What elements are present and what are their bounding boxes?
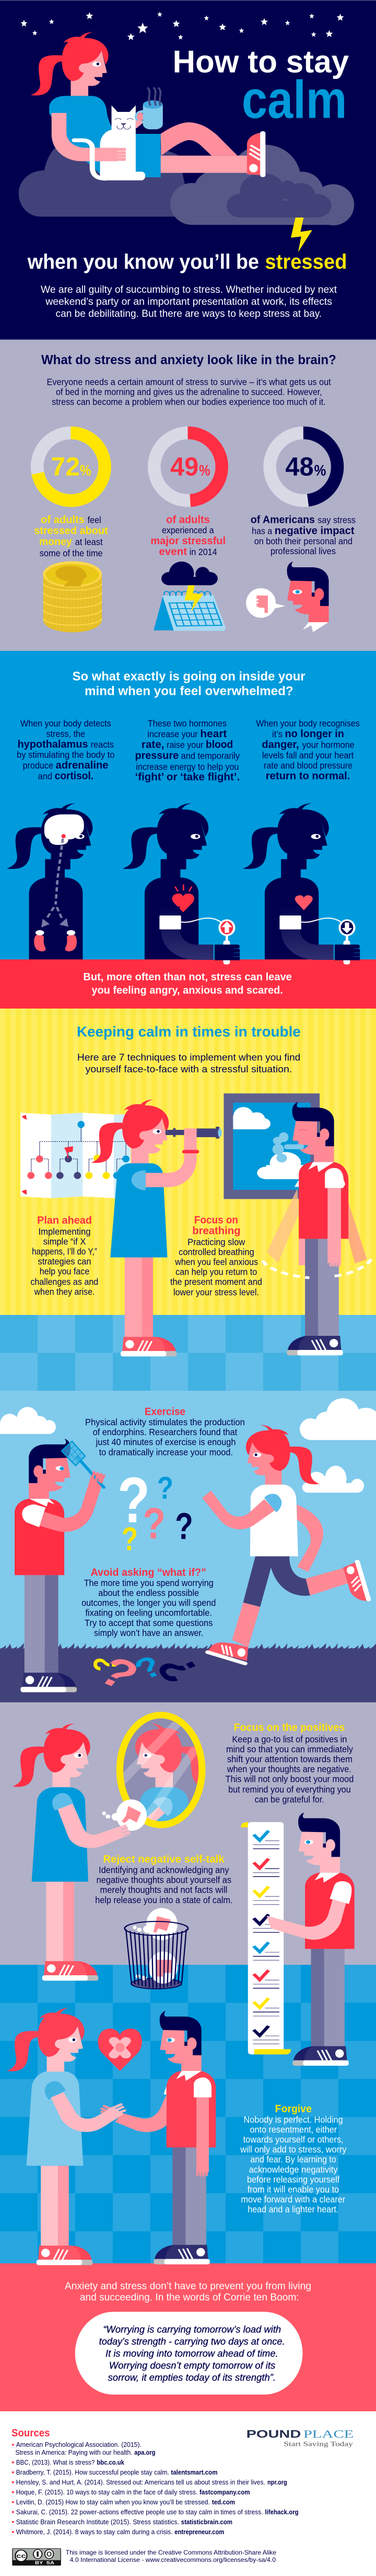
panel: what goes on inside xyxy=(7,669,360,965)
text: seven techniques: Here are 7 techniques to implement when you find xyxy=(77,1052,300,1062)
icon: bandaged heart xyxy=(98,2029,142,2071)
caption: money xyxy=(34,513,108,558)
text: plan ahead: Plan ahead xyxy=(37,1214,92,1227)
quote bubble xyxy=(75,2312,302,2395)
text: step three xyxy=(256,718,360,782)
text: what if: about the endless possible xyxy=(98,1588,199,1598)
panel: forgive xyxy=(7,2008,347,2246)
caption: money: of adults xyxy=(41,513,85,526)
caption: money: some of the time xyxy=(40,548,103,558)
text: seven techniques: yourself face-to-face with a stressful situation. xyxy=(85,1063,292,1074)
figure: return to normal xyxy=(243,803,360,965)
caption: negative impact xyxy=(251,513,356,556)
text: forgive: acknowledge negativity xyxy=(249,2165,338,2175)
caption: negative impact: professional lives xyxy=(271,546,336,556)
text: focus on breathing: can help you return to xyxy=(175,1267,257,1277)
heading: inside your mind: mind when you feel overwhelmed? xyxy=(85,684,293,698)
source list: Bradberry, T. (2015). How successful people stay calm. xyxy=(16,2469,169,2476)
heading: keeping calm: Keeping calm in times in trouble xyxy=(77,1023,301,1039)
text: forgive xyxy=(240,2103,347,2215)
text: step two: raise your xyxy=(167,740,203,750)
text: focus on breathing: Focus on xyxy=(194,1214,238,1226)
source list: fastcompany.com xyxy=(199,2489,250,2496)
chart: 49 percent ring: 49 xyxy=(170,452,198,481)
source list: Stress in America: Paying with our health. xyxy=(15,2449,132,2456)
question marks on the ground: ? xyxy=(146,1649,211,1690)
text: focus on positives xyxy=(226,1721,354,1804)
text: plan ahead: help you face xyxy=(40,1267,89,1277)
panel: exercise and what if xyxy=(0,1398,376,1702)
text: step two: heart xyxy=(200,728,227,740)
text: exercise: of endorphins. Researchers found that xyxy=(93,1427,237,1437)
panel: plan ahead and breathing xyxy=(20,1093,372,1337)
girl shaking hands xyxy=(7,2008,85,2246)
text: plan ahead: strategies can xyxy=(38,1257,91,1267)
text: what if: Avoid asking “what if?” xyxy=(91,1566,206,1578)
source list: Whitmore, J. (2014). 8 ways to stay calm during a crisis. xyxy=(16,2528,173,2536)
shoe: girl at mirror xyxy=(42,1961,98,1980)
quote bubble: today’s strength - carrying two days at once. xyxy=(99,2336,285,2347)
text: closing statement xyxy=(65,2280,311,2303)
question marks on the ground xyxy=(88,1647,211,1699)
question marks falling: ? xyxy=(157,1471,173,1506)
text: exercise: just 40 minutes of exercise is enough xyxy=(96,1437,236,1447)
intro text xyxy=(41,284,337,319)
question marks falling: ? xyxy=(175,1505,193,1547)
panel: closing quote xyxy=(37,2245,311,2395)
man shaking hands xyxy=(51,2011,216,2246)
mirror xyxy=(116,1712,213,1828)
source list: ted.com xyxy=(212,2499,235,2506)
title xyxy=(173,44,349,129)
man with fly swatter xyxy=(15,1439,105,1692)
text: what if: The more time you spend worrying xyxy=(84,1578,214,1588)
text: brain intro xyxy=(47,377,331,407)
text: exercise: Physical activity stimulates the production xyxy=(85,1417,245,1427)
text: reject negative self-talk: merely thoughts and not facts will xyxy=(100,1885,227,1895)
logo: poundplace xyxy=(246,2428,354,2448)
text: step one xyxy=(17,718,114,782)
map with decision tree xyxy=(20,1113,131,1198)
badge: creative commons xyxy=(13,2548,61,2566)
badge: creative commons: BY xyxy=(35,2561,43,2566)
text: exercise xyxy=(85,1406,245,1458)
text: step two xyxy=(135,718,240,783)
text: focus on breathing: the present moment and xyxy=(170,1277,262,1287)
source list: Hoque, F. (2015). 10 ways to stay calm in the face of daily stress. xyxy=(16,2489,197,2496)
source list: lifehack.org xyxy=(265,2509,299,2516)
chart: 48 percent ring: 48 xyxy=(285,452,314,481)
question marks falling: ? xyxy=(118,1464,150,1536)
source list: Statistic Brain Research Institute (2015). Stress statistics. xyxy=(16,2518,179,2526)
text: exercise: Exercise xyxy=(145,1406,185,1418)
text: step one: cortisol. xyxy=(55,770,93,782)
source list: talentsmart.com xyxy=(171,2469,217,2476)
source list: npr.org xyxy=(267,2479,287,2486)
question marks falling xyxy=(118,1464,193,1558)
grass xyxy=(0,1642,376,1702)
cloud: right storm xyxy=(170,145,354,225)
panel: negative self-talk and positives xyxy=(13,1712,354,1964)
caption: money: at least xyxy=(75,537,103,547)
quote bubble: sorrow, it empties today of its strength”. xyxy=(108,2372,276,2383)
text: what if xyxy=(81,1566,216,1638)
text: step two: increase your xyxy=(147,729,198,739)
chart: 72 percent ring xyxy=(37,433,105,500)
banner: angry anxious scared: you feeling angry, anxious and scared. xyxy=(91,984,283,997)
girl with cat and mug xyxy=(31,32,265,180)
text: step one: hypothalamus xyxy=(18,738,88,750)
text: plan ahead: happens, I’ll do Y,” xyxy=(32,1247,97,1257)
text: plan ahead: Implementing xyxy=(38,1227,91,1237)
text: plan ahead xyxy=(30,1214,98,1297)
text: step two: and temporarily xyxy=(181,751,240,761)
logo: poundplace: Start Saving Today xyxy=(284,2441,353,2448)
caption: negative impact: has a xyxy=(252,526,272,536)
caption: money: money xyxy=(39,535,72,547)
source list: statisticbrain.com xyxy=(181,2518,232,2526)
text: focus on breathing xyxy=(170,1214,262,1297)
text: step one: by stimulating the body to xyxy=(17,750,114,760)
figure: hypothalamus and adrenal glands xyxy=(7,803,92,959)
text: forgive: Forgive xyxy=(275,2103,312,2115)
icon: storm over calendar xyxy=(154,562,226,631)
text: step two: blood xyxy=(206,738,233,751)
caption: negative impact: say stress xyxy=(318,516,356,525)
source list: BBC, (2013). What is stress? xyxy=(16,2459,95,2466)
question marks on the ground: ? xyxy=(89,1647,149,1699)
text: step three: danger, xyxy=(262,738,299,751)
panel: techniques intro xyxy=(77,1023,301,1074)
icon: man with thumbs down speech bubble xyxy=(246,562,329,632)
text: reject negative self-talk: Reject negative self-talk xyxy=(103,1853,225,1865)
chart: 48 percent ring xyxy=(270,433,337,500)
text: focus on breathing: controlled breathing xyxy=(179,1247,254,1257)
text: step three: it’s xyxy=(272,729,283,739)
chart: 49 percent ring xyxy=(154,433,222,500)
text: step two: rate, xyxy=(142,738,164,751)
question marks falling: ? xyxy=(143,1499,166,1548)
source list xyxy=(12,2441,299,2536)
icon: lightning bolt xyxy=(291,217,312,252)
cloud: left xyxy=(19,145,192,216)
text: plan ahead: challenges as and xyxy=(30,1277,98,1287)
text: step two: These two hormones xyxy=(148,718,227,728)
question marks falling: ? xyxy=(122,1521,138,1558)
panel: hero header xyxy=(19,12,354,225)
logo: poundplace: PLACE xyxy=(303,2428,354,2441)
question marks on the ground: ? xyxy=(127,1650,170,1686)
chart: 48 percent ring: % xyxy=(314,462,326,479)
text: step two: ‘fight’ or ‘take flight’. xyxy=(135,771,240,783)
text: step one: stress, the xyxy=(46,729,85,739)
icon: waste bin with thoughts xyxy=(125,1908,188,1989)
caption: money: feel xyxy=(88,516,101,525)
text: reject negative self-talk: Identifying and acknowledging any xyxy=(99,1865,229,1875)
source list: American Psychological Association. (2015). xyxy=(16,2441,142,2448)
source list: apa.org xyxy=(134,2449,156,2456)
source list: Levitin, D. (2015) How to stay calm when you know you’ll be stressed. xyxy=(16,2499,210,2506)
heading: inside your mind xyxy=(73,669,306,698)
caption: stressful event: of adults xyxy=(166,513,210,526)
text: what if: simply won’t have an answer. xyxy=(94,1628,203,1638)
text: what if: outcomes, the longer you will spend xyxy=(81,1598,216,1608)
badge: creative commons: cc xyxy=(16,2553,26,2560)
source list: Hensley, S. and Hurt, A. (2014). Stressed out: Americans tell us about stress in their lives. xyxy=(16,2479,265,2486)
quote bubble: “Worrying is carrying tomorrow’s load with xyxy=(103,2324,281,2335)
banner: angry anxious scared: But, more often than not, stress can leave xyxy=(83,971,292,983)
girl running xyxy=(202,1425,369,1664)
chart: 72 percent ring: 72 xyxy=(51,452,80,481)
chart: 72 percent ring: % xyxy=(80,462,91,479)
text: seven techniques xyxy=(77,1052,300,1074)
license text xyxy=(66,2549,276,2563)
text: step one: reacts xyxy=(91,740,114,750)
text: step one: adrenaline xyxy=(56,759,109,771)
clouds xyxy=(0,1398,376,1493)
source list: entrepreneur.com xyxy=(174,2528,224,2536)
quote bubble: It is moving into tomorrow ahead of time. xyxy=(105,2348,278,2359)
caption: negative impact: of Americans xyxy=(251,513,315,526)
caption: stressful event xyxy=(150,513,226,558)
text: step three: no longer in xyxy=(285,728,344,740)
text: forgive: and fear. By learning to xyxy=(250,2155,336,2165)
text: reject negative self-talk: help release you into a state of calm. xyxy=(95,1895,232,1905)
stars xyxy=(21,12,344,40)
source list: bbc.co.uk xyxy=(97,2459,124,2466)
badge: creative commons: SA xyxy=(46,2561,54,2566)
man breathing xyxy=(263,1102,372,1336)
subtitle: when you know you’ll be xyxy=(27,250,259,273)
text: reject negative self-talk: negative thoughts about yourself as xyxy=(97,1875,231,1885)
panel: sources footer xyxy=(11,2427,354,2566)
text: focus on breathing: lower your stress level. xyxy=(173,1287,259,1297)
text: exercise: to dramatically increase your mood. xyxy=(99,1448,233,1458)
text: step two: increase energy to help you xyxy=(136,762,239,772)
text: what if: fixating on feeling uncomfortable. xyxy=(85,1608,212,1618)
text: step one: When your body detects xyxy=(20,718,111,728)
license text: This image is licensed under the Creative Commons Attribution-Share Alike xyxy=(66,2549,276,2556)
text: focus on breathing: when you feel anxious xyxy=(174,1257,258,1267)
girl with telescope xyxy=(91,1100,222,1337)
question marks on the ground: ? xyxy=(88,1657,123,1671)
window with clouds xyxy=(224,1093,320,1199)
chart: 49 percent ring: % xyxy=(199,462,210,479)
heading: sources: Sources xyxy=(11,2427,50,2439)
text: step two: pressure xyxy=(135,749,179,762)
caption: stressful event: event xyxy=(159,545,187,558)
text: step one: and xyxy=(38,772,52,782)
license text: 4.0 International License - www.creativecommons.org/licenses/by-sa/4.0 xyxy=(70,2557,276,2563)
figure: raised heart rate xyxy=(123,803,240,965)
caption: stressful event: experienced a xyxy=(162,525,214,535)
panel: statistics xyxy=(34,433,356,632)
shoes: plan ahead figures xyxy=(121,1336,343,1356)
text: closing statement: and succeeding. In the words of Corrie ten Boom: xyxy=(80,2292,299,2303)
icon: coin stack xyxy=(43,561,102,632)
caption: stressful event: major stressful xyxy=(150,535,226,547)
quote bubble: Worrying doesn’t empty tomorrow of its xyxy=(109,2360,275,2371)
text: plan ahead: simple “if X xyxy=(43,1237,86,1247)
text: plan ahead: when they arise. xyxy=(34,1287,95,1297)
text: step one: produce xyxy=(23,761,53,771)
text: forgive: onto resentment, either xyxy=(250,2125,337,2135)
text: reject negative self-talk xyxy=(95,1853,232,1905)
checklist scroll xyxy=(241,1822,291,2054)
caption: money: stressed about xyxy=(34,524,108,536)
cloud: small dark xyxy=(227,173,332,217)
logo: poundplace: POUND xyxy=(246,2428,301,2441)
girl with thought bubble xyxy=(13,1723,147,1964)
text: what if: Try to accept that some questions xyxy=(85,1618,213,1628)
text: focus on positives: can be grateful for. xyxy=(255,1794,324,1804)
source list: Sakurai, C. (2015). 22 power-actions effective people use to stay calm in times of stress. xyxy=(16,2509,263,2516)
banner: angry anxious scared xyxy=(83,971,292,997)
text: focus on breathing: breathing xyxy=(192,1224,241,1237)
shoes: forgive figures xyxy=(37,2245,210,2265)
text: focus on breathing: Practicing slow xyxy=(187,1238,245,1247)
man with checklist xyxy=(267,1813,355,2066)
caption: stressful event: in 2014 xyxy=(190,547,217,557)
